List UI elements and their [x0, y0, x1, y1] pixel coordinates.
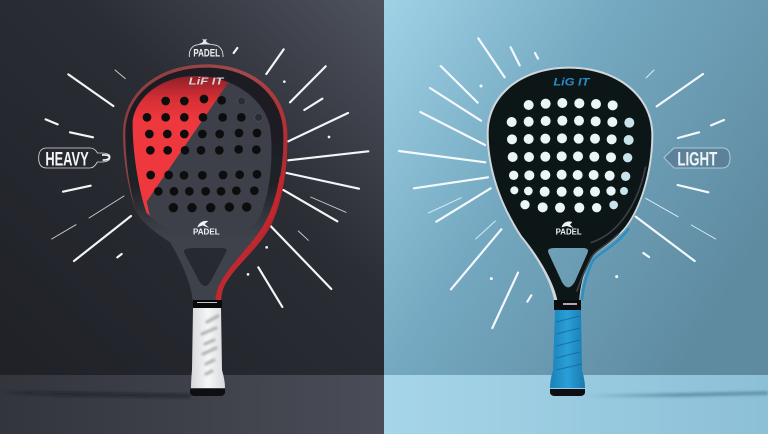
brand mark: light top: LiG IT	[553, 76, 591, 88]
holes: heavy	[143, 95, 263, 212]
panel: light racket side	[399, 38, 724, 328]
label: LIGHT tag	[664, 148, 730, 170]
label: PADEL tag: PADEL	[193, 48, 220, 60]
brand logo: light bottom	[556, 221, 582, 237]
burst rays: light	[399, 38, 724, 328]
racket face: heavy	[132, 76, 272, 222]
handle: heavy racket	[190, 300, 226, 396]
handle: light racket	[549, 300, 586, 396]
brand logo: heavy bottom: PADEL	[193, 228, 220, 237]
brand mark: heavy top: LiF IT	[189, 77, 224, 88]
label: HEAVY tag: HEAVY	[45, 149, 89, 170]
brand logo: heavy bottom	[193, 221, 220, 237]
panel: heavy racket side	[46, 48, 368, 307]
racket head and throat: light	[487, 67, 653, 300]
burst rays: heavy	[46, 48, 368, 307]
holes: light	[507, 98, 634, 213]
panel: heavy background	[0, 0, 384, 434]
panel: light background	[384, 0, 768, 434]
racket head and throat: heavy	[123, 64, 287, 300]
label: LIGHT tag: LIGHT	[677, 149, 717, 170]
label: PADEL tag	[189, 39, 223, 60]
brand logo: light bottom: PADEL	[556, 228, 582, 237]
